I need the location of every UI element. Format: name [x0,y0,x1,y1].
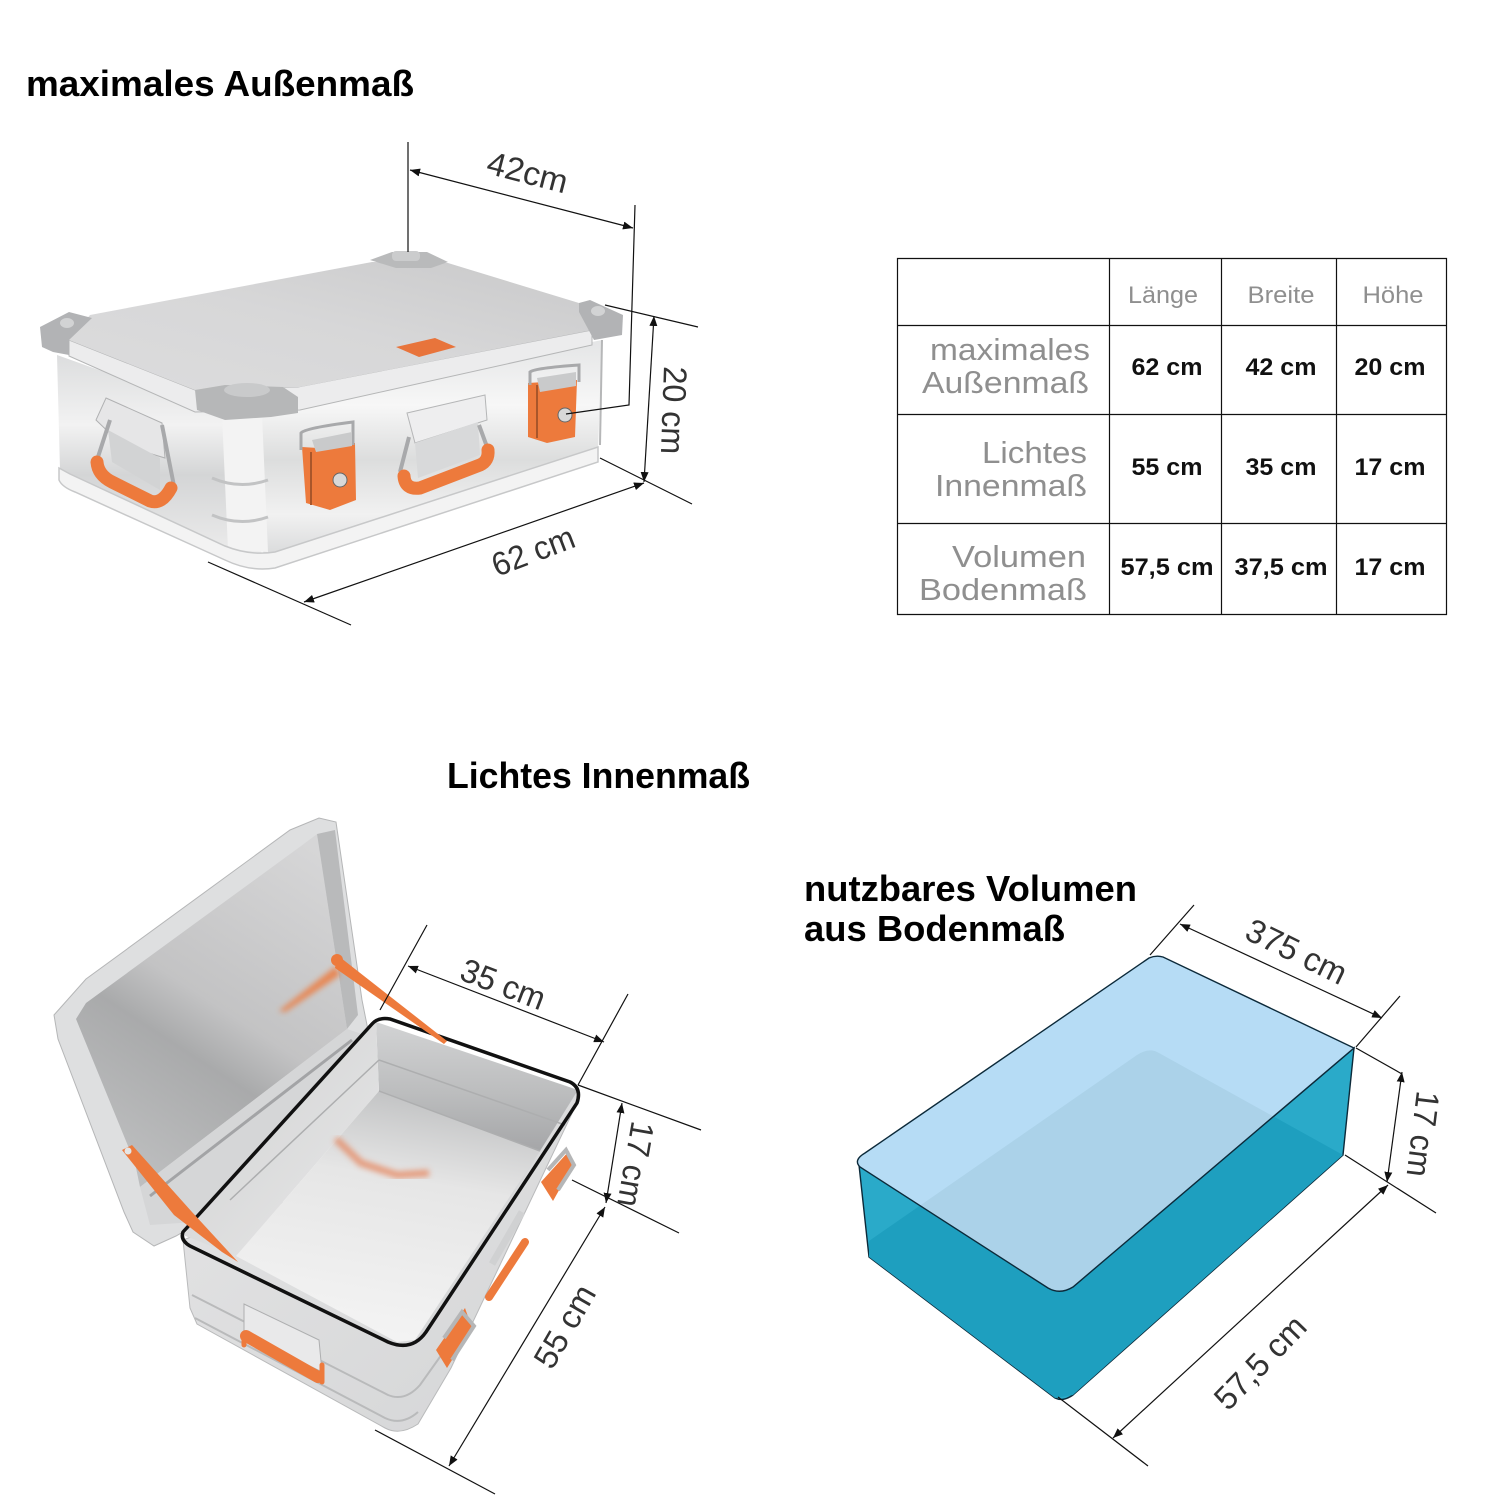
row: Volumen Bodenmaß: 17 cm [1354,554,1426,581]
row: Lichtes Innenmaß: Innenmaß [935,468,1087,503]
column headers: Höhe [1362,282,1424,309]
column headers [1128,282,1424,309]
corner highlight [222,415,268,552]
dimension: 35 cm [380,925,628,1085]
row: maximales Außenmaß: 20 cm [1354,354,1426,381]
side handle [489,1212,525,1297]
open aluminium box [54,818,578,1431]
heading: nutzbares Volumen aus Bodenmaß [804,868,1137,949]
blue usable volume block [857,956,1354,1399]
dimension: 42cm: 42cm [483,144,572,200]
left handle [96,398,174,502]
visible floor through top [921,1050,1272,1290]
dimension: 17 cm (inside): 17 cm [610,1119,662,1210]
dimension: 35 cm: 35 cm [455,951,551,1017]
column headers: Breite [1248,282,1314,309]
orange straps [122,956,447,1262]
row: maximales Außenmaß: 62 cm [1132,354,1202,381]
rubber seal [182,1019,578,1345]
reflected strap [336,1139,429,1175]
floor [236,1091,540,1342]
body outside [183,1092,578,1431]
right latch [528,365,579,443]
row: Lichtes Innenmaß: 55 cm [1132,454,1202,481]
body interior [183,1022,578,1342]
heading: maximales Außenmaß: maximales Außenmaß [26,63,414,104]
orange logo plate [396,338,456,357]
dimension: 17 cm (volume): 17 cm [1400,1089,1447,1179]
row: Volumen Bodenmaß [919,539,1426,607]
dimension: 375 cm [1150,905,1400,1047]
dimension: 20 cm: 20 cm [654,366,694,455]
dimension: 62 cm: 62 cm [486,518,580,584]
closed aluminium box [40,251,623,569]
heading: nutzbares Volumen aus Bodenmaß: nutzbares Volumen [804,868,1137,909]
dimension: 17 cm (inside) [572,1085,701,1233]
top outline [857,956,1354,1291]
centre handle [400,395,490,488]
dimension: 20 cm [600,305,698,504]
row: Volumen Bodenmaß: Bodenmaß [919,572,1087,607]
front latch [301,422,356,510]
front handle [244,1304,322,1382]
lid rim [69,330,592,412]
row: Lichtes Innenmaß [935,435,1426,503]
row: Lichtes Innenmaß: 17 cm [1354,454,1426,481]
row: Lichtes Innenmaß: 35 cm [1246,454,1316,481]
heading: Lichtes Innenmaß: Lichtes Innenmaß [447,755,750,796]
row: maximales Außenmaß [922,332,1426,400]
latches [436,1150,574,1368]
bottom rim [59,447,598,569]
dimension: 375 cm: 375 cm [1240,911,1353,992]
row: maximales Außenmaß: 42 cm [1246,354,1316,381]
dimension: 42cm [408,142,635,414]
top face [857,956,1354,1291]
heading: nutzbares Volumen aus Bodenmaß: aus Bodenmaß [804,908,1065,949]
back wall [376,1022,578,1151]
left short side [57,355,262,555]
dimension: 57,5 cm [1058,1185,1388,1466]
dimension: 57,5 cm: 57,5 cm [1206,1308,1314,1417]
side faces [859,1048,1354,1399]
left wall [183,1022,379,1256]
row: maximales Außenmaß: Außenmaß [922,365,1089,400]
visible floor through sides [869,1117,1343,1398]
row: Lichtes Innenmaß: Lichtes [982,435,1087,470]
long front side [225,340,602,558]
open lid [54,818,369,1246]
row: Volumen Bodenmaß: 37,5 cm [1234,554,1328,581]
lid corners [40,312,92,355]
dimension: 17 cm (volume) [1345,1048,1447,1213]
dimension: 55 cm [375,1207,605,1494]
dimension: 62 cm [208,483,644,625]
lid top [69,262,592,390]
dimensions table [898,258,1446,614]
row: maximales Außenmaß: maximales [930,332,1090,367]
column headers: Länge [1128,282,1198,309]
side edge shadow [600,340,602,445]
row: Volumen Bodenmaß: 57,5 cm [1120,554,1214,581]
dimension: 55 cm: 55 cm [526,1278,603,1374]
row: Volumen Bodenmaß: Volumen [952,539,1086,574]
